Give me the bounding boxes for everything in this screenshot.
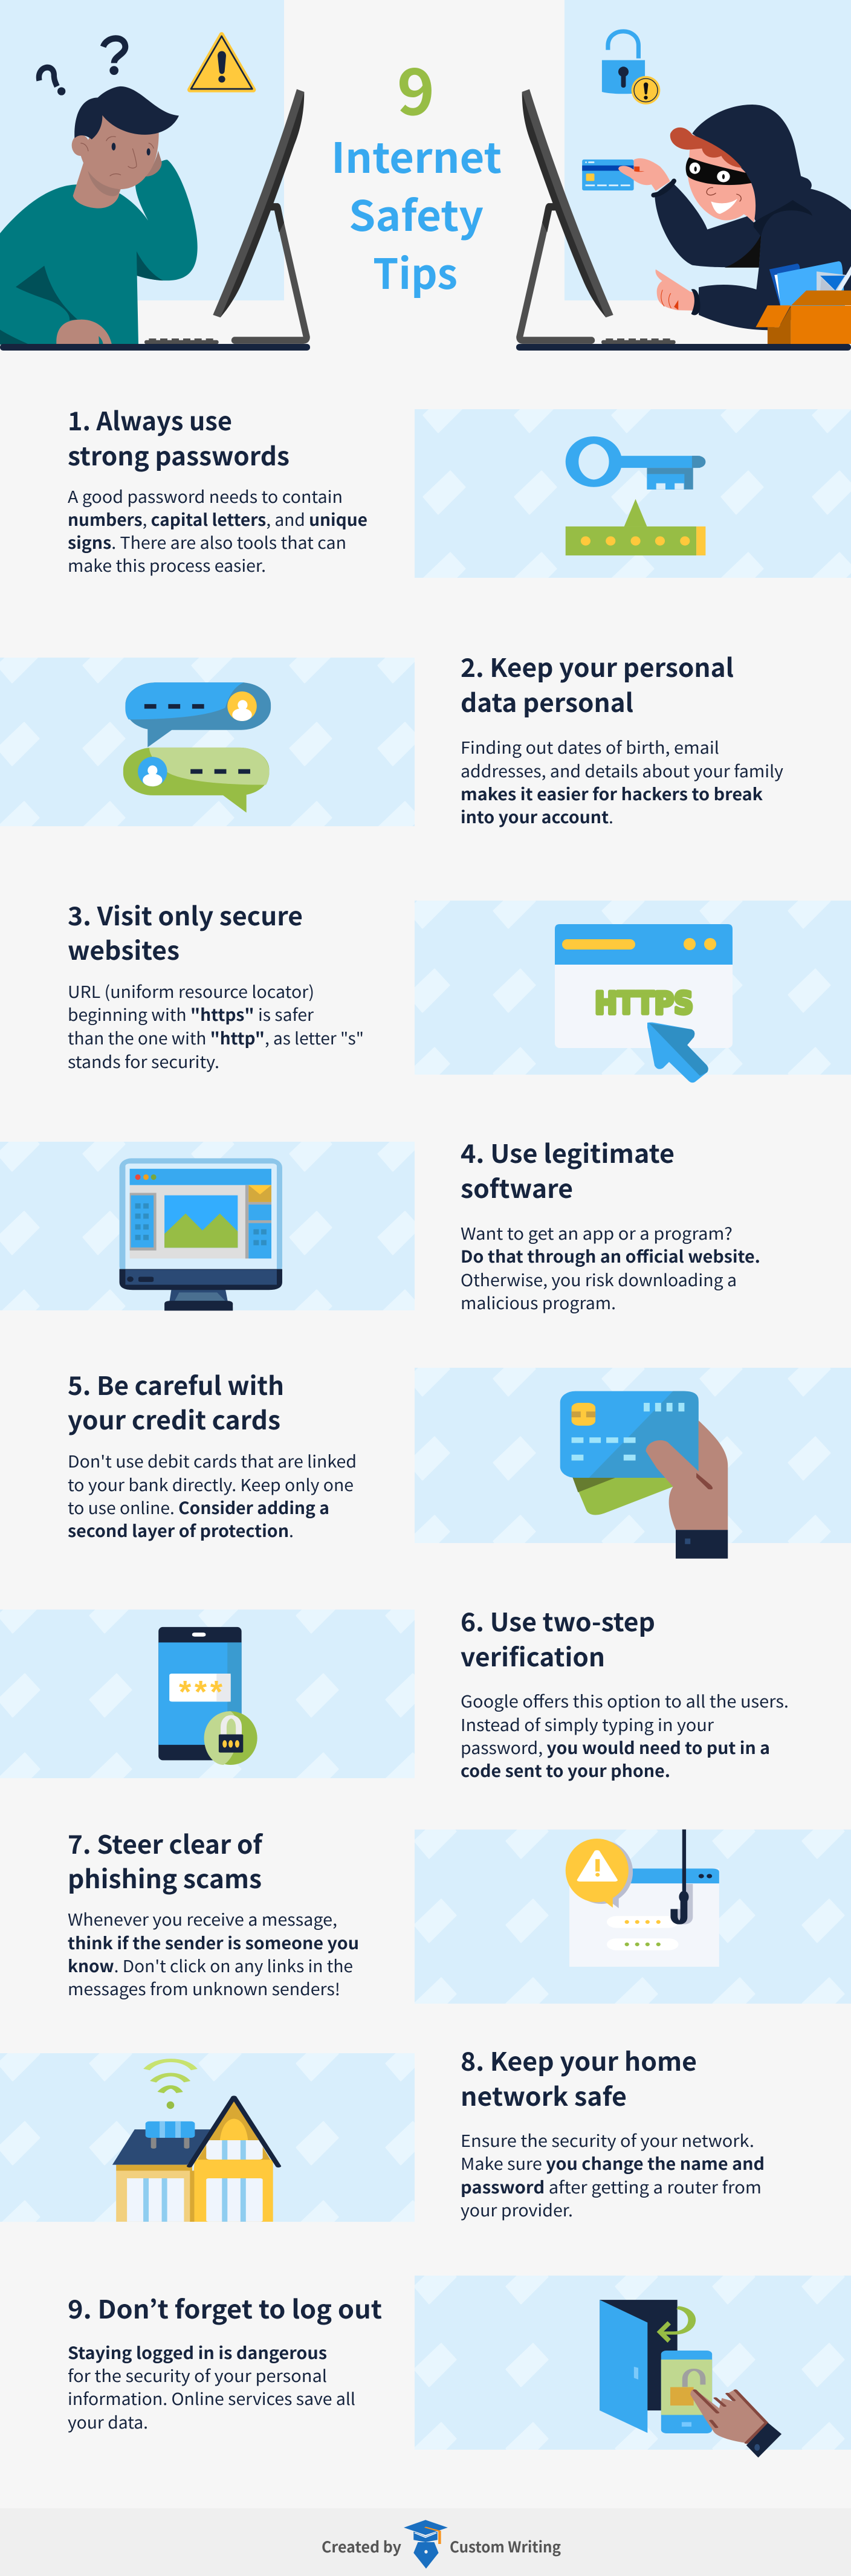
text: tip 1 body: signs. There are also tools that can xyxy=(68,529,346,554)
icon: browser window with https xyxy=(555,924,733,1048)
illustration: left monitor xyxy=(213,89,306,340)
text: tip 1 body: make this process easier. xyxy=(68,552,266,577)
heading: tip 4: software xyxy=(461,1169,573,1206)
text: tip 4 body xyxy=(461,1220,760,1314)
text: tip 5 body: Don't use debit cards that are linked xyxy=(68,1448,357,1472)
icon: right keyboard xyxy=(601,338,676,344)
title: Tips xyxy=(373,241,458,301)
heading: tip 9: 9. Don’t forget to log out xyxy=(68,2290,382,2326)
heading: tip 6: verification xyxy=(461,1637,605,1674)
panel: worried user background xyxy=(0,0,284,300)
text: tip 9 body: for the security of your personal xyxy=(68,2363,327,2387)
text: tip 2 body: addresses, and details about your family xyxy=(461,758,783,782)
panel: tip 6 illustration xyxy=(0,1610,415,1778)
tip 2 xyxy=(0,640,783,844)
heading: tip 6: 6. Use two-step xyxy=(461,1602,655,1639)
text: tip 2 body: makes it easier for hackers to break xyxy=(461,781,763,805)
text: tip 4 body: malicious program. xyxy=(461,1290,616,1314)
text: tip 3 body: URL (uniform resource locator) xyxy=(68,979,314,1003)
icon: key and password field xyxy=(566,440,705,555)
text: tip 6 body: Instead of simply typing in your xyxy=(461,1712,714,1736)
illustration: worried man at computer xyxy=(0,39,198,345)
title: Safety xyxy=(349,183,484,243)
text: tip 1 body xyxy=(68,484,367,577)
text: tip 6 body: code sent to your phone. xyxy=(461,1758,670,1782)
icon: smartphone with code and padlock xyxy=(158,1627,257,1765)
panel: tip 9 illustration xyxy=(415,2276,851,2450)
text: tip 8 body: password after getting a router from xyxy=(461,2174,762,2198)
title: Internet xyxy=(331,125,502,185)
text: tip 3 body: beginning with "https" is safer xyxy=(68,1002,314,1026)
text: tip 8 body: Make sure you change the name and xyxy=(461,2150,765,2175)
left desk xyxy=(0,344,310,351)
text: tip 7 body: messages from unknown senders! xyxy=(68,1976,340,2000)
icon: warning triangle xyxy=(190,34,253,90)
heading: tip 7: 7. Steer clear of xyxy=(68,1825,263,1862)
title: 9 xyxy=(397,40,435,134)
heading: tip 5 xyxy=(68,1366,284,1437)
text: tip 2 body: Finding out dates of birth, email xyxy=(461,734,719,759)
tip 6 xyxy=(0,1590,789,1796)
tip 5 xyxy=(68,1353,851,1559)
heading: tip 3: websites xyxy=(68,931,180,968)
tip 4 xyxy=(0,1128,760,1333)
text: tip 4 body: Do that through an official website. xyxy=(461,1243,760,1267)
text: tip 6 body xyxy=(461,1688,789,1782)
text: tip 4 body: Want to get an app or a program? xyxy=(461,1220,733,1244)
text: tip 9 body xyxy=(68,2340,355,2433)
footer xyxy=(0,2508,851,2576)
text: tip 5 body: to use online. Consider adding a xyxy=(68,1495,329,1519)
footer text: created by: Created by xyxy=(322,2536,402,2557)
heading: tip 8 xyxy=(461,2042,697,2114)
text: tip 3 body xyxy=(68,979,364,1073)
heading: tip 3 xyxy=(68,896,303,968)
text: tip 7 body: Whenever you receive a message, xyxy=(68,1906,337,1930)
text: tip 5 body: second layer of protection . xyxy=(68,1518,294,1542)
text: tip 3 body: than the one with "http", as letter "s" xyxy=(68,1025,364,1049)
icon: hand holding credit cards xyxy=(560,1391,728,1559)
text: tip 5 body xyxy=(68,1448,357,1542)
text: tip 5 body: to your bank directly. Keep only one xyxy=(68,1472,354,1496)
text: tip 2 body xyxy=(461,734,783,828)
heading: tip 6 xyxy=(461,1602,655,1674)
heading: tip 7: phishing scams xyxy=(68,1859,262,1896)
text: tip 4 body: Otherwise, you risk downloading a xyxy=(461,1267,737,1291)
panel: tip 4 illustration xyxy=(0,1142,415,1310)
heading: tip 8: network safe xyxy=(461,2077,627,2114)
text: tip 2 body: into your account . xyxy=(461,804,613,828)
icon: house with router and wifi xyxy=(112,2060,279,2222)
tip 8 xyxy=(0,2038,765,2244)
text: tip 8 body xyxy=(461,2128,765,2221)
footer text: custom writing: Custom Writing xyxy=(450,2536,561,2557)
text: tip 7 body xyxy=(68,1906,359,2000)
heading: tip 7 xyxy=(68,1825,263,1896)
panel: tip 2 illustration xyxy=(0,658,415,826)
icon: chat bubbles xyxy=(123,682,271,812)
icon: phishing hook on login window xyxy=(566,1830,719,1967)
panel: tip 3 illustration xyxy=(415,901,851,1075)
text: tip 7 body: know. Don't click on any links in the xyxy=(68,1953,353,1977)
icon: smartphone with code and padlock: *** xyxy=(179,1675,223,1710)
icon: desktop monitor xyxy=(120,1158,282,1310)
text: tip 8 body: Ensure the security of your network. xyxy=(461,2128,754,2152)
icon: door, phone and hand logging out xyxy=(600,2300,781,2458)
heading: tip 3: 3. Visit only secure xyxy=(68,896,303,933)
text: tip 6 body: Google offers this option to all the users. xyxy=(461,1688,789,1712)
text: tip 1 body: numbers, capital letters, and unique xyxy=(68,506,367,531)
heading: tip 8: 8. Keep your home xyxy=(461,2042,697,2079)
title xyxy=(331,40,502,301)
heading: tip 1 xyxy=(68,401,290,473)
heading: tip 1: strong passwords xyxy=(68,436,290,473)
tip 9 xyxy=(68,2261,851,2465)
icon: left keyboard xyxy=(144,338,219,344)
panel: tip 5 illustration xyxy=(415,1368,851,1543)
text: tip 9 body: Staying logged in is dangerous xyxy=(68,2340,327,2364)
logo: graduation cap and pen xyxy=(404,2520,448,2569)
heading: tip 2: data personal xyxy=(461,683,633,720)
tip 1 xyxy=(68,390,851,595)
icon: open padlock with alert xyxy=(602,31,660,105)
panel: tip 1 illustration xyxy=(415,409,851,578)
text: tip 7 body: think if the sender is someone you xyxy=(68,1930,359,1954)
heading: tip 4: 4. Use legitimate xyxy=(461,1134,675,1171)
header xyxy=(0,0,851,351)
icon: cursor arrow xyxy=(647,1023,708,1083)
heading: tip 5: 5. Be careful with xyxy=(68,1366,284,1403)
panel: tip 7 illustration xyxy=(415,1830,851,2004)
heading: tip 5: your credit cards xyxy=(68,1400,280,1437)
tip 7 xyxy=(68,1816,851,2021)
tip 3 xyxy=(68,885,851,1090)
heading: tip 2: 2. Keep your personal xyxy=(461,648,734,685)
footer band xyxy=(0,2508,851,2576)
icon: browser window with https: HTTPS xyxy=(595,986,693,1021)
text: tip 8 body: your provider. xyxy=(461,2197,573,2221)
text: tip 1 body: A good password needs to contain xyxy=(68,484,343,508)
illustration: hacker xyxy=(582,105,851,344)
text: tip 3 body: stands for security. xyxy=(68,1049,219,1073)
illustration: right monitor xyxy=(520,89,613,340)
panel: hacker background xyxy=(565,0,851,300)
heading: tip 1: 1. Always use xyxy=(68,401,232,438)
right desk xyxy=(516,344,851,351)
text: tip 9 body: your data. xyxy=(68,2409,148,2433)
heading: tip 4 xyxy=(461,1134,675,1206)
heading: tip 2 xyxy=(461,648,734,720)
text: tip 6 body: password, you would need to put in a xyxy=(461,1735,770,1759)
text: tip 9 body: information. Online services save all xyxy=(68,2386,355,2410)
panel: tip 8 illustration xyxy=(0,2053,415,2222)
